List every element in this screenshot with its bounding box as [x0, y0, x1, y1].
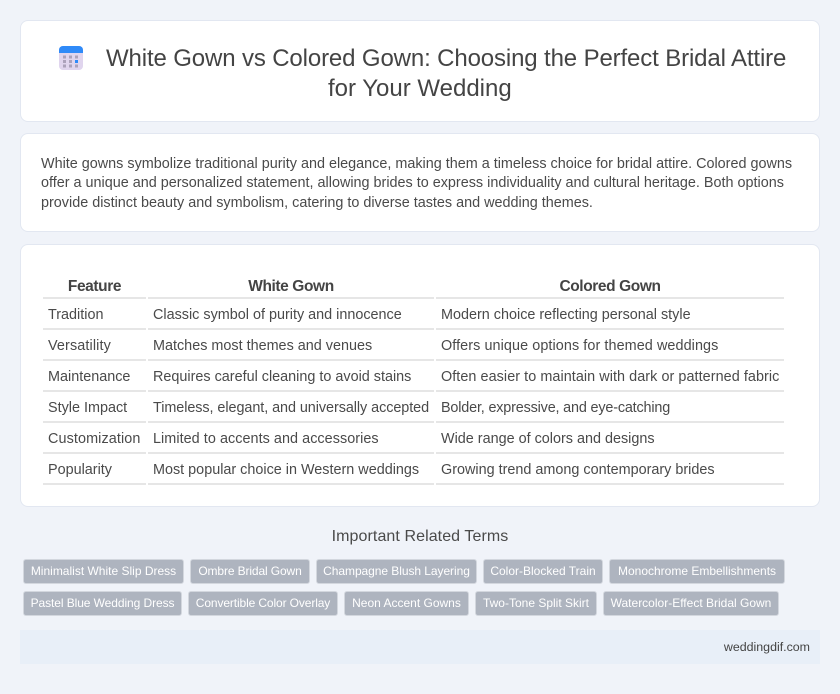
- panel: introduction: [20, 133, 820, 232]
- tags: related terms: [23, 559, 785, 616]
- tags: related terms: Pastel Blue Wedding Dress: [31, 596, 174, 610]
- tags: related terms: Color-Blocked Train: [490, 564, 596, 578]
- title: for Your Wedding: [328, 75, 512, 102]
- row: Style Impact: Bolder, expressive, and eye-catching: [441, 400, 670, 416]
- row: Versatility: Versatility: [48, 338, 111, 354]
- icon: calendar: [59, 46, 83, 70]
- row: Style Impact: [48, 400, 670, 416]
- tags: related terms: Ombre Bridal Gown: [198, 564, 302, 578]
- row: Customization: Customization: [48, 431, 140, 447]
- tags: related terms: Convertible Color Overlay: [196, 596, 330, 610]
- tags: related terms: Monochrome Embellishments: [618, 564, 776, 578]
- table: comparison: [43, 278, 784, 485]
- table header: Colored Gown: [559, 278, 661, 294]
- tags: related terms: Watercolor-Effect Bridal Gown: [611, 596, 771, 610]
- row: Tradition: [48, 307, 691, 323]
- row: Customization: Wide range of colors and designs: [441, 431, 655, 447]
- row: Versatility: Offers unique options for themed weddings: [441, 338, 718, 354]
- row: Customization: [48, 431, 655, 447]
- heading: related terms: Important Related Terms: [332, 528, 508, 545]
- row: Popularity: [48, 462, 715, 478]
- tags: related terms: Neon Accent Gowns: [352, 596, 461, 610]
- footer bar: [20, 630, 820, 664]
- panel: comparison table: [20, 244, 820, 507]
- row: Tradition: Modern choice reflecting personal style: [441, 307, 691, 323]
- row: Maintenance: Requires careful cleaning to avoid stains: [153, 369, 411, 385]
- table header: Feature: [68, 278, 121, 294]
- panel: title card: [20, 20, 820, 122]
- row: Tradition: Classic symbol of purity and innocence: [153, 307, 402, 323]
- table header: White Gown: [248, 278, 334, 294]
- tags: related terms: Minimalist White Slip Dress: [31, 564, 176, 578]
- row: Versatility: Matches most themes and venues: [153, 338, 372, 354]
- text block: introduction: offer a unique and personalized statement, allowing brides to express individuality and cultural heritage. Both options: [41, 175, 784, 191]
- row: Maintenance: [48, 369, 779, 385]
- text block: introduction: [41, 156, 792, 211]
- row: Versatility: [48, 338, 718, 354]
- tags: related terms: Champagne Blush Layering: [323, 564, 470, 578]
- row: Style Impact: Style Impact: [48, 400, 127, 416]
- row: Popularity: Growing trend among contemporary brides: [441, 462, 715, 478]
- row: Tradition: Tradition: [48, 307, 103, 323]
- text block: introduction: White gowns symbolize traditional purity and elegance, making them a timeless choice for bridal attire. Colored gowns: [41, 156, 792, 172]
- row: Maintenance: Maintenance: [48, 369, 130, 385]
- title: [106, 45, 786, 102]
- title: White Gown vs Colored Gown: Choosing the Perfect Bridal Attire: [106, 45, 786, 72]
- row: Customization: Limited to accents and accessories: [153, 431, 379, 447]
- tags: related terms: Two-Tone Split Skirt: [483, 596, 589, 610]
- footer source text: weddingdif.com: [724, 640, 810, 654]
- text block: introduction: provide distinct beauty and symbolism, catering to diverse tastes and wedding themes.: [41, 195, 593, 211]
- row: Style Impact: Timeless, elegant, and universally accepted: [153, 400, 429, 416]
- row: Popularity: Most popular choice in Western weddings: [153, 462, 419, 478]
- row: Popularity: Popularity: [48, 462, 112, 478]
- row: Maintenance: Often easier to maintain with dark or patterned fabric: [441, 369, 779, 385]
- table header: [68, 278, 661, 294]
